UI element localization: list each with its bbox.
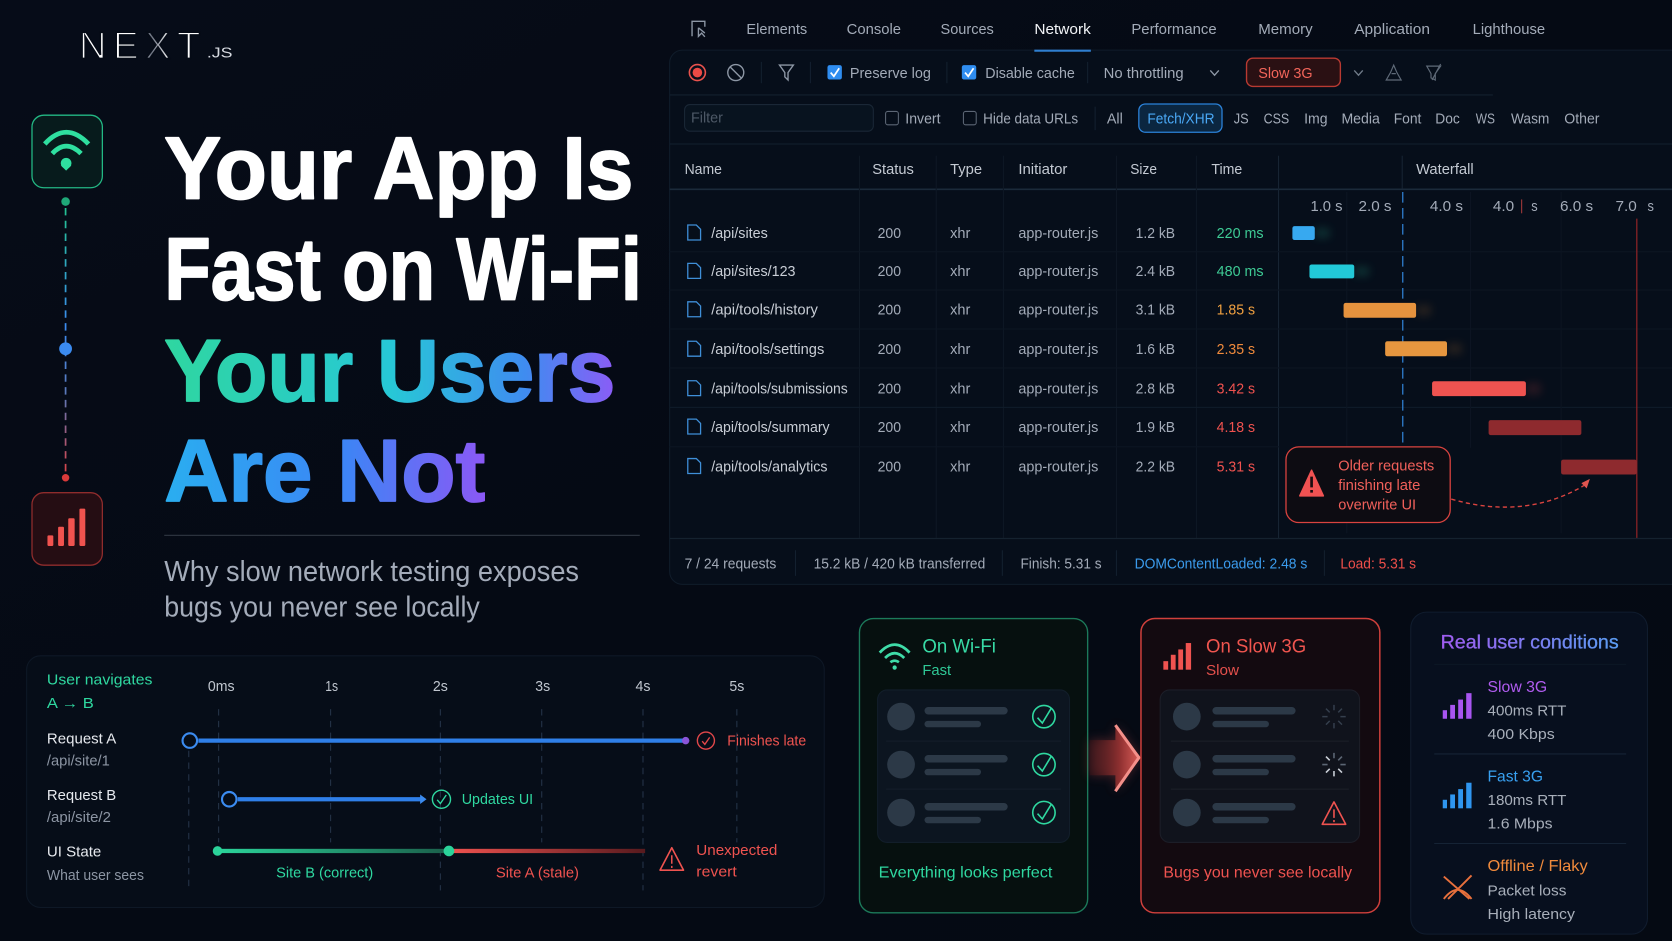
request row: sites/123: xhr [950, 263, 970, 280]
callout: older requests overwrite UI: finishing late [1338, 477, 1420, 494]
request row: tools/submissions: 2.8 kB [1136, 381, 1175, 398]
request row: sites: 220 ms [1217, 225, 1264, 242]
condition: fast 3g: 180ms RTT [1488, 792, 1566, 809]
status bar: 15.2 kB / 420 kB transferred [814, 555, 985, 572]
request row: tools/summary: 4.18 s [1217, 419, 1255, 436]
panel: on wi-fi [859, 619, 1088, 913]
request row: tools/analytics: 200 [878, 458, 901, 475]
request row: sites: /api/sites [711, 225, 768, 242]
callout: older requests overwrite UI [1286, 447, 1450, 523]
request row: tools/analytics: 5.31 s [1217, 458, 1255, 475]
request row: tools/settings: app-router.js [1018, 341, 1098, 358]
request row: tools/history: xhr [950, 302, 970, 319]
wi-fi heading: Fast [922, 662, 952, 679]
subtitle: bugs you never see locally [164, 591, 480, 623]
panel: devtools network [670, 21, 1672, 584]
devtools filter bar: CSS [1264, 111, 1289, 128]
devtools tabs: Sources [941, 21, 994, 38]
UI state bar: Site B (correct) [276, 865, 373, 882]
request row: tools/submissions: /api/tools/submissions [711, 381, 848, 398]
request row: tools/history: app-router.js [1018, 302, 1098, 319]
devtools filter bar: Wasm [1511, 111, 1549, 128]
timeline axis [189, 678, 744, 890]
condition: fast 3g: 1.6 Mbps [1488, 816, 1553, 833]
condition: offline or flaky: Packet loss [1488, 883, 1566, 900]
table header: Type [950, 161, 982, 178]
condition: offline or flaky: Offline / Flaky [1488, 858, 1588, 875]
devtools tabs: Application [1354, 21, 1430, 38]
connector: wifi to slow network [59, 197, 72, 481]
condition: fast 3g: Fast 3G [1488, 769, 1543, 786]
timeline axis: 3s [535, 678, 550, 695]
request row: tools/analytics: /api/tools/analytics [711, 458, 827, 475]
devtools filter bar: Filter [691, 110, 723, 127]
condition: slow 3g [1443, 679, 1566, 743]
wi-fi caption: Everything looks perfect [879, 865, 1053, 882]
devtools toolbar [689, 58, 1441, 86]
timeline axis: 1s [325, 678, 338, 695]
request row: tools/history: 200 [878, 302, 901, 319]
request row: sites: app-router.js [1018, 225, 1098, 242]
timeline axis: 2s [433, 678, 448, 695]
condition: slow 3g: 400 Kbps [1488, 726, 1555, 743]
timeline axis: 5s [729, 678, 744, 695]
timeline row labels: /api/site/2 [47, 809, 111, 826]
condition: offline or flaky [1444, 858, 1588, 923]
logo: Next.js: .JS [207, 45, 233, 62]
devtools filter bar: Hide data URLs [983, 111, 1078, 128]
request row: sites/123 [688, 263, 1369, 280]
timeline row labels: UI State [47, 843, 101, 860]
wi-fi heading [922, 637, 996, 679]
request A bar [183, 732, 806, 749]
devtools filter bar: Media [1341, 111, 1380, 128]
devtools tabs: Lighthouse [1473, 21, 1545, 38]
devtools tabs: Performance [1131, 21, 1217, 38]
panel: race condition timeline [27, 656, 824, 907]
list preview: loading and error [1160, 690, 1360, 842]
devtools tabs: Network [1034, 21, 1091, 38]
request row: tools/analytics [688, 458, 1637, 475]
request row: tools/summary: 200 [878, 419, 901, 436]
devtools tabs [692, 21, 1545, 51]
request row: tools/summary: 1.9 kB [1136, 419, 1175, 436]
panel: on slow 3g [1141, 619, 1380, 913]
status bar [685, 550, 1416, 576]
devtools toolbar: Slow 3G [1258, 65, 1313, 82]
devtools filter bar: Fetch/XHR [1147, 111, 1215, 128]
timeline row labels [47, 672, 152, 884]
request row: tools/settings: /api/tools/settings [711, 341, 824, 358]
title: Fast on Wi-Fi [164, 220, 642, 319]
waterfall time scale: s [1647, 198, 1654, 215]
list preview: all loaded [878, 690, 1070, 842]
devtools toolbar: No throttling [1104, 65, 1184, 82]
timeline row labels: A → B [47, 695, 94, 712]
request row: sites/123: /api/sites/123 [711, 263, 795, 280]
devtools tabs: Console [847, 21, 901, 38]
title: Your Users [164, 321, 615, 420]
table header: Waterfall [1416, 161, 1474, 178]
waterfall time scale: 6.0 s [1560, 198, 1593, 215]
request row: tools/submissions: 3.42 s [1217, 381, 1255, 398]
request row: tools/summary: app-router.js [1018, 419, 1098, 436]
devtools filter bar: WS [1476, 111, 1495, 128]
slow 3g heading [1206, 637, 1306, 679]
conditions heading: Real user conditions [1441, 632, 1619, 653]
timeline row labels: /api/site/1 [47, 753, 110, 770]
status bar: Load: 5.31 s [1340, 555, 1416, 572]
table header: Initiator [1018, 161, 1067, 178]
timeline axis: 0ms [208, 678, 235, 695]
slow 3g caption: Bugs you never see locally [1163, 865, 1352, 882]
request row: tools/submissions: 200 [878, 381, 901, 398]
table header: Time [1211, 161, 1242, 178]
arrow: wifi to slow 3g [1090, 725, 1141, 791]
request row: tools/submissions [688, 381, 1541, 398]
request row: sites/123: 480 ms [1217, 263, 1264, 280]
warning: unexpected revert [660, 842, 777, 881]
table header [685, 161, 1474, 178]
request row: sites/123: 200 [878, 263, 901, 280]
title: Are Not [164, 421, 485, 520]
request row: sites/123: app-router.js [1018, 263, 1098, 280]
warning: unexpected revert: Unexpected [696, 842, 777, 859]
wi-fi heading: On Wi-Fi [922, 637, 996, 658]
icon: wifi [880, 645, 910, 669]
waterfall time scale [1311, 198, 1654, 215]
callout: older requests overwrite UI: Older requests [1338, 457, 1434, 474]
devtools toolbar: Preserve log [850, 65, 931, 82]
timeline row labels: Request A [47, 730, 116, 747]
status bar: DOMContentLoaded: 2.48 s [1135, 555, 1307, 572]
request row: tools/summary: xhr [950, 419, 970, 436]
waterfall time scale: 1.0 s [1311, 198, 1343, 215]
devtools filter bar: Font [1394, 111, 1422, 128]
request row: tools/settings: 2.35 s [1217, 341, 1255, 358]
request row: tools/settings [688, 341, 1462, 358]
timeline row labels: User navigates [47, 672, 152, 689]
request row: sites: 200 [878, 225, 901, 242]
status bar: Finish: 5.31 s [1020, 555, 1102, 572]
warning: unexpected revert: revert [696, 864, 738, 881]
subtitle [164, 556, 579, 623]
request row: tools/history [688, 302, 1431, 319]
title: Your App Is [164, 118, 633, 217]
status bar: 7 / 24 requests [685, 555, 776, 572]
devtools tabs: Elements [746, 21, 807, 38]
title [164, 118, 642, 520]
request row: tools/submissions: app-router.js [1018, 381, 1098, 398]
waterfall time scale: 2.0 s [1359, 198, 1392, 215]
table header: Size [1130, 161, 1157, 178]
devtools filter bar: All [1107, 111, 1123, 128]
request row: tools/analytics: app-router.js [1018, 458, 1098, 475]
timeline axis: 4s [636, 678, 650, 695]
request B bar [222, 790, 533, 808]
slow 3g heading: On Slow 3G [1206, 637, 1306, 658]
waterfall time scale: 4.0 s [1430, 198, 1463, 215]
devtools filter bar: JS [1234, 111, 1249, 128]
request B bar: Updates UI [462, 791, 533, 808]
subtitle: Why slow network testing exposes [164, 556, 579, 588]
request row: tools/history: /api/tools/history [711, 302, 818, 319]
UI state bar: Site A (stale) [496, 865, 579, 882]
icon: wifi status box [32, 115, 102, 188]
request row: tools/summary [688, 419, 1581, 436]
waterfall time scale: 4.0 [1493, 198, 1514, 215]
request row: tools/history: 1.85 s [1217, 302, 1255, 319]
condition: fast 3g [1443, 769, 1566, 833]
request row: sites: 1.2 kB [1136, 225, 1175, 242]
waterfall time scale: s [1531, 198, 1538, 215]
timeline row labels: Request B [47, 787, 116, 804]
request row: sites/123: 2.4 kB [1136, 263, 1175, 280]
request row: tools/analytics: 2.2 kB [1136, 458, 1175, 475]
request row: sites: xhr [950, 225, 970, 242]
devtools filter bar: Doc [1435, 111, 1460, 128]
devtools toolbar: Disable cache [985, 65, 1075, 82]
arrow: callout to late bar [1451, 479, 1590, 507]
table header: Status [872, 161, 914, 178]
UI state bar [213, 846, 645, 882]
panel: real user conditions [1411, 612, 1647, 934]
request row: tools/settings: xhr [950, 341, 970, 358]
devtools filter bar: Invert [905, 111, 941, 128]
icon: slow bars [1163, 643, 1191, 670]
request row: sites [688, 225, 1330, 242]
devtools filter bar: Img [1304, 111, 1328, 128]
request row: tools/settings: 200 [878, 341, 901, 358]
devtools filter bar [685, 104, 1600, 132]
condition: slow 3g: Slow 3G [1488, 679, 1547, 696]
logo: Next.js: NEXT [79, 25, 200, 68]
request row: tools/submissions: xhr [950, 381, 970, 398]
request row: tools/analytics: xhr [950, 458, 970, 475]
callout: older requests overwrite UI: overwrite UI [1338, 497, 1416, 514]
request row: tools/settings: 1.6 kB [1136, 341, 1175, 358]
timeline row labels: What user sees [47, 867, 144, 884]
devtools tabs: Memory [1258, 21, 1313, 38]
request row: tools/summary: /api/tools/summary [711, 419, 830, 436]
condition: slow 3g: 400ms RTT [1488, 703, 1566, 720]
condition: offline or flaky: High latency [1488, 906, 1576, 923]
slow 3g heading: Slow [1206, 662, 1239, 679]
devtools filter bar: Other [1564, 111, 1600, 128]
request A bar: Finishes late [727, 732, 806, 749]
icon: slow signal box [32, 493, 102, 565]
waterfall time scale: 7.0 [1615, 198, 1637, 215]
table header: Name [685, 161, 722, 178]
request row: tools/history: 3.1 kB [1136, 302, 1175, 319]
